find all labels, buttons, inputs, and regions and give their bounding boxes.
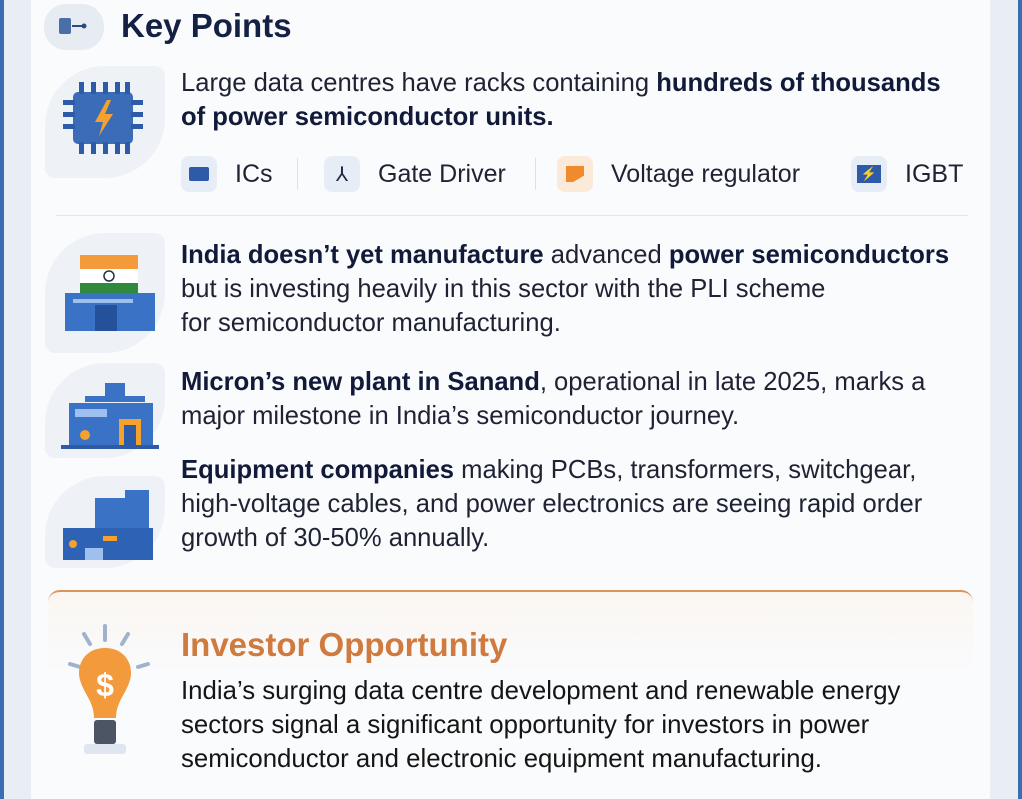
- text: Micron: [181, 368, 926, 430]
- text: India manufacturing: but is investing heavily in this sector with the PLI scheme: [181, 275, 825, 303]
- text: India manufacturing: for semiconductor manufacturing.: [181, 309, 561, 337]
- tag: IGBT: IGBT: [905, 160, 963, 188]
- tag: ICs: ICs: [235, 160, 272, 188]
- text: racks: Large data centres have racks containing hundreds of thousands: [181, 69, 941, 97]
- tag: ICs: [181, 156, 272, 192]
- icon: Micron plant: [45, 363, 165, 458]
- text: Equipment: [181, 456, 922, 552]
- icon: lightbulb: $: [96, 667, 114, 703]
- text: racks: [181, 69, 941, 131]
- icon: equipment: [45, 476, 165, 568]
- tag: Gate Driver: Gate Driver: [378, 160, 506, 188]
- heading: Investor Opportunity: Investor Opportunity: [181, 626, 507, 663]
- text: Equipment: high-voltage cables, and power electronics are seeing rapid order: [181, 490, 922, 518]
- icon: chip: [45, 66, 165, 178]
- title: Key Points: [121, 7, 292, 44]
- text: investor: semiconductor and electronic equipment manufacturing.: [181, 745, 822, 773]
- tag: IGBT: [851, 156, 963, 192]
- icon: lightbulb: [68, 624, 150, 754]
- tag: IGBT: ⚡: [861, 166, 877, 181]
- icon: India flag factory: [45, 233, 165, 353]
- text: investor: [181, 677, 900, 773]
- tag: Voltage regulator: [557, 156, 800, 192]
- tag: Voltage regulator: Voltage regulator: [611, 160, 800, 188]
- tag: Gate Driver: [324, 156, 506, 192]
- text: Equipment: growth of 30-50% annually.: [181, 524, 489, 552]
- text: Micron: Micron’s new plant in Sanand, operational in late 2025, marks a: [181, 368, 925, 396]
- text: racks: of power semiconductor units.: [181, 103, 554, 131]
- panel: investor opportunity: [48, 590, 973, 799]
- text: Micron: major milestone in India’s semiconductor journey.: [181, 402, 739, 430]
- text: Equipment: Equipment companies making PCBs, transformers, switchgear,: [181, 456, 916, 484]
- tag: Gate Driver: ⅄: [336, 164, 348, 186]
- text: investor: India’s surging data centre development and renewable energy: [181, 677, 900, 705]
- text: India manufacturing: India doesn’t yet manufacture advanced power semiconductors: [181, 241, 949, 269]
- text: India manufacturing: [181, 241, 949, 337]
- text: investor: sectors signal a significant opportunity for investors in power: [181, 711, 869, 739]
- header icon: [44, 4, 104, 50]
